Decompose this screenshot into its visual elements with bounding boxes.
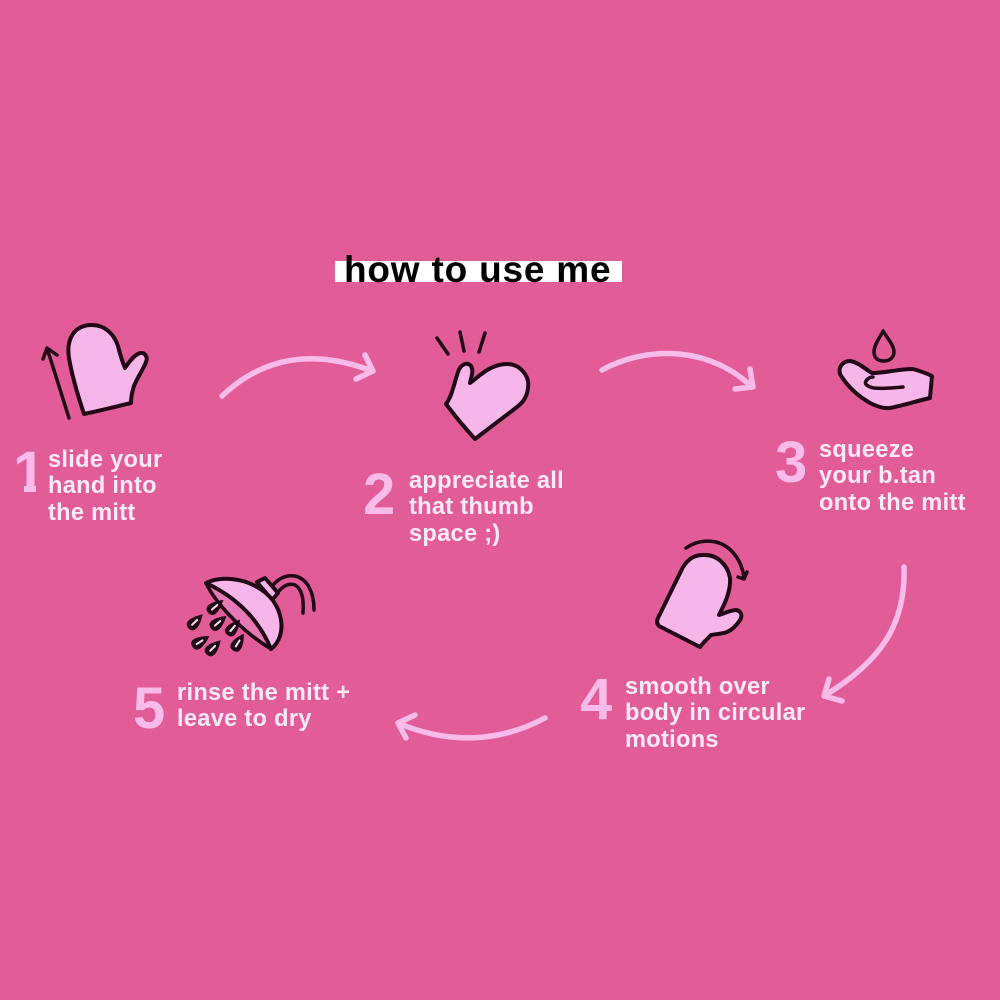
text: smooth over body in circular motions: smooth over <box>625 674 770 700</box>
step 2: appreciate all that thumb space <box>363 332 564 547</box>
arrow: step 3 to 4 <box>824 567 904 701</box>
text: appreciate all that thumb space: appreciate all <box>409 468 564 494</box>
title: how to use me <box>344 249 611 290</box>
icon: shower head <box>185 576 314 658</box>
text: rinse the mitt + leave to dry: leave to dry <box>177 706 312 732</box>
step 5: rinse the mitt and leave to dry <box>133 576 350 741</box>
text: slide your hand into the mitt: hand into <box>48 473 157 499</box>
icon: mitt with circular arrow <box>657 541 747 647</box>
text: squeeze your b.tan onto the mitt: squeeze <box>819 437 914 463</box>
text: squeeze your b.tan onto the mitt: your b.tan <box>819 463 936 489</box>
text: smooth over body in circular motions: body in circular <box>625 700 806 726</box>
text: appreciate all that thumb space: space ;) <box>409 521 501 547</box>
number 5: 5 <box>133 676 165 741</box>
text: squeeze your b.tan onto the mitt: onto the mitt <box>819 490 966 516</box>
number 2: 2 <box>363 462 395 527</box>
text: slide your hand into the mitt: the mitt <box>48 500 136 526</box>
water drops <box>185 596 249 658</box>
step 1: slide your hand into the mitt <box>13 325 162 526</box>
text: rinse the mitt + leave to dry: rinse the mitt + <box>177 680 350 706</box>
text: smooth over body in circular motions: motions <box>625 727 719 753</box>
number 4: 4 <box>580 667 612 732</box>
step 4: smooth over body in circular motions <box>580 541 806 753</box>
icon: mitt with up arrow <box>43 325 147 418</box>
icon: mitt with thumb up and sparkle lines <box>437 332 528 439</box>
arrow: step 4 to 5 <box>398 715 545 738</box>
text: slide your hand into the mitt: slide your <box>48 447 162 473</box>
text: appreciate all that thumb space: that thumb <box>409 494 534 520</box>
arrow: step 2 to 3 <box>602 353 753 389</box>
arrow: step 1 to 2 <box>222 355 373 396</box>
number 1: 1 <box>13 440 45 505</box>
icon: hand with drop <box>840 331 932 408</box>
step 3: squeeze your b.tan onto the mitt <box>775 331 966 516</box>
number 3: 3 <box>775 430 807 495</box>
